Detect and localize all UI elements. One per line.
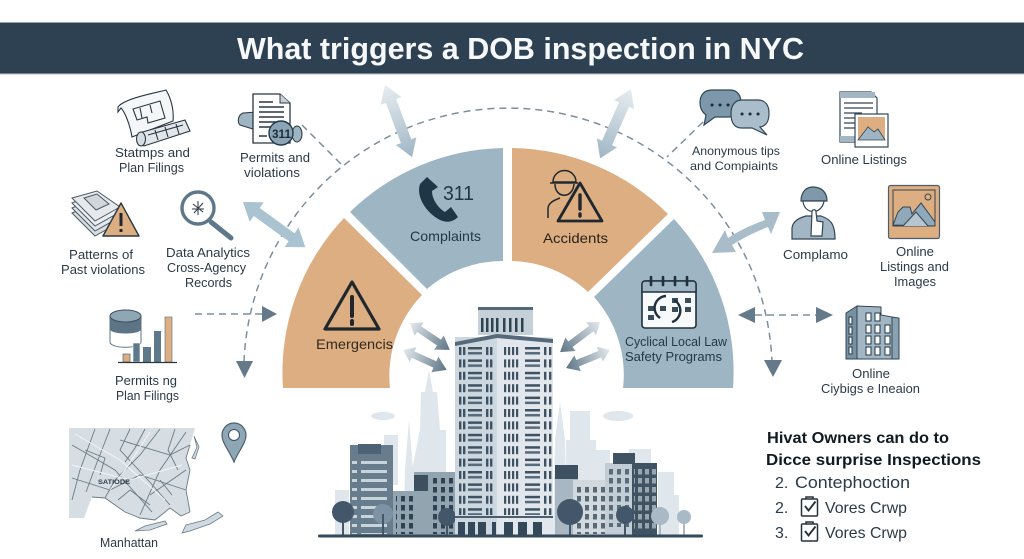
dashed orbit arc xyxy=(195,108,816,362)
icon: framed photo xyxy=(888,186,940,238)
icon: database and bars xyxy=(110,310,177,362)
arrow: top left xyxy=(375,81,422,161)
central tower xyxy=(455,307,553,535)
icon: calendar xyxy=(642,277,696,328)
label: patterns of past violations xyxy=(61,248,145,277)
segment: complaints xyxy=(350,148,503,289)
label: anonymous tips: Anonymous tips xyxy=(692,144,780,158)
segment: cyclical programs xyxy=(594,219,734,388)
segment: accidents xyxy=(512,148,668,292)
small arrow: upper left xyxy=(405,316,455,357)
icon: office building xyxy=(846,306,899,359)
icon: permit document xyxy=(238,94,302,145)
label: data analytics xyxy=(166,246,250,290)
ground line xyxy=(318,534,703,538)
label: Accidents xyxy=(543,230,608,246)
warning mark xyxy=(350,297,354,324)
icon: chat bubbles xyxy=(700,90,769,135)
label: Emergencis xyxy=(316,336,393,352)
label: Complaints xyxy=(410,228,481,244)
checklist item 2: Vores Crwp xyxy=(825,500,907,517)
icon: blueprints xyxy=(118,90,190,146)
icon: warning triangle xyxy=(325,282,379,329)
label: online listings and images: Online xyxy=(896,245,934,259)
label: permits and violations: violations xyxy=(244,166,300,180)
right buildings xyxy=(555,453,657,535)
label: permitting plan filings: Plan Filings xyxy=(116,389,179,403)
icon: stack with warning xyxy=(72,191,139,236)
small arrow: lower right xyxy=(563,342,613,376)
label: patterns of past violations: Past violations xyxy=(61,263,145,277)
label: stamps and plan filings: Statmps and xyxy=(115,146,190,160)
label: Cyclical Local Law xyxy=(625,335,728,349)
trees xyxy=(332,499,691,536)
label: permitting plan filings xyxy=(115,374,179,403)
arrow: top right xyxy=(590,85,641,163)
checklist item 1: Contephoction xyxy=(795,473,910,492)
dashed arrowheads xyxy=(236,306,833,378)
icon: magnifier xyxy=(182,192,231,238)
icon: document with image xyxy=(840,92,888,147)
311 text: 311 xyxy=(443,183,474,205)
label: manhattan: Manhattan xyxy=(100,536,158,550)
icon: person shushing xyxy=(792,187,835,239)
checklist item 1: 2. xyxy=(775,475,788,492)
arrow: left double xyxy=(236,192,312,257)
label: permits and violations xyxy=(240,151,310,180)
checklist item 3: Vores Crwp xyxy=(825,525,907,542)
icon: phone xyxy=(419,177,458,222)
checklist item 2: 2. xyxy=(775,500,788,517)
small arrow: lower left xyxy=(399,342,450,378)
label: data analytics: Records xyxy=(185,276,232,290)
label: online listings and images xyxy=(880,245,949,289)
map text: SATIODE xyxy=(98,479,131,486)
checklist item 3 xyxy=(775,522,907,542)
checklist heading: Dicce surprise Inspections xyxy=(766,452,981,469)
warning mark xyxy=(578,195,582,216)
title: What triggers a DOB inspection in NYC xyxy=(237,31,804,66)
label: complamo: Complamo xyxy=(783,248,848,262)
label: online listings and images: Images xyxy=(894,275,936,289)
label: data analytics: Cross-Agency xyxy=(167,261,247,275)
label: anonymous tips: and Compiaints xyxy=(690,159,778,173)
checklist heading xyxy=(766,430,981,469)
checklist heading: Hivat Owners can do to xyxy=(767,430,949,447)
icon: location pin xyxy=(222,423,246,462)
311 badge text: 311 xyxy=(272,127,291,141)
arrow: right double xyxy=(712,212,780,253)
label: online cybersecurity: Online xyxy=(852,367,890,381)
label: online cybersecurity: Ciybigs e Ineaion xyxy=(821,382,920,396)
checklist item 2 xyxy=(775,497,907,517)
label: online listings: Online Listings xyxy=(821,153,907,167)
label: stamps and plan filings xyxy=(115,146,190,175)
label: stamps and plan filings: Plan Filings xyxy=(119,161,184,175)
label: data analytics: Data Analytics xyxy=(166,246,250,260)
icon: warning xyxy=(558,183,602,221)
background skyline xyxy=(335,370,679,535)
label: online cybersecurity xyxy=(821,367,920,396)
label: permitting plan filings: Permits ng xyxy=(115,374,177,388)
label: Safety Programs xyxy=(625,350,722,364)
label: anonymous tips xyxy=(690,144,780,173)
segment: emergencies xyxy=(282,218,422,388)
map xyxy=(69,428,223,533)
label: online listings and images: Listings and xyxy=(880,260,949,274)
left buildings xyxy=(350,444,455,535)
icon: worker xyxy=(548,170,578,218)
label: permits and violations: Permits and xyxy=(240,151,310,165)
small arrow: upper right xyxy=(555,315,605,359)
checklist item 3: 3. xyxy=(775,525,788,542)
title banner xyxy=(0,22,1024,74)
label: patterns of past violations: Patterns of xyxy=(69,248,134,262)
owners checklist xyxy=(766,430,981,542)
